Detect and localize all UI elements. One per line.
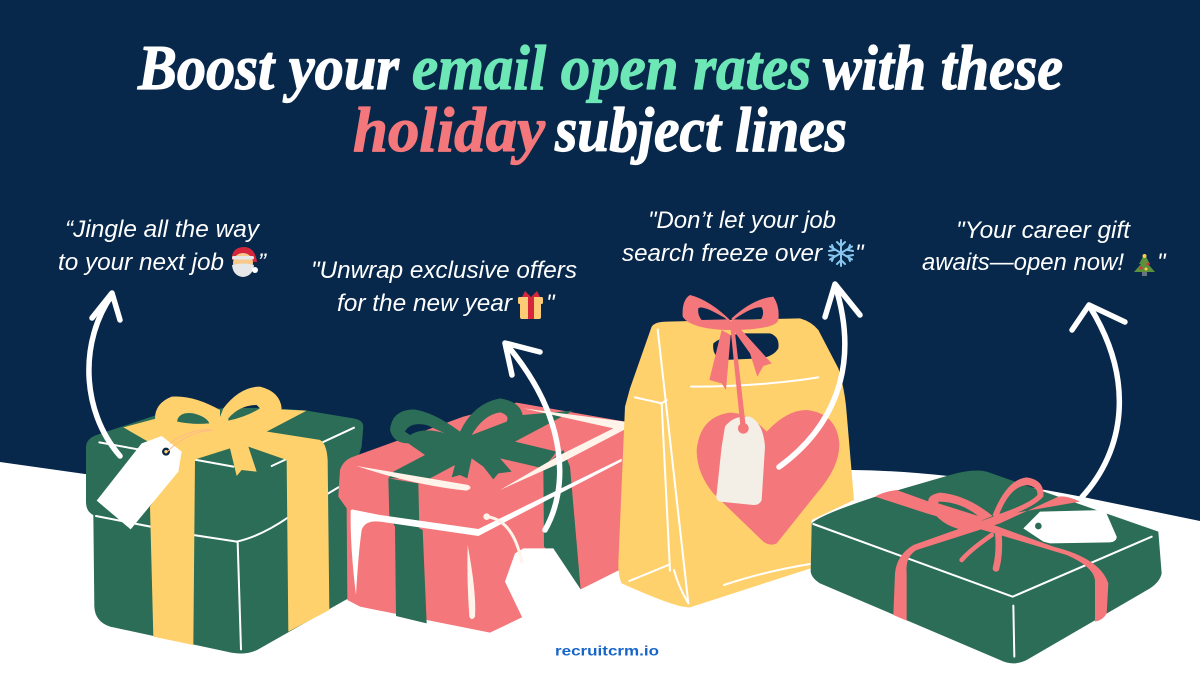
quote 1: to your next job [58, 249, 224, 276]
title: email open rates [412, 32, 811, 103]
pink ribbon [875, 477, 1108, 622]
title: subject lines [554, 94, 847, 165]
quote 4 [922, 217, 1167, 276]
bag body [618, 318, 854, 607]
icon: gift [518, 291, 543, 319]
gift tag [97, 429, 213, 529]
gift tag [1023, 510, 1117, 543]
quote 4: "Your career gift [956, 217, 1131, 244]
gift 1: green box with yellow ribbon [86, 387, 363, 654]
box edge lines [96, 428, 354, 649]
box body [86, 408, 363, 654]
green bow [388, 398, 573, 479]
quote 4: awaits—open now! [922, 249, 1124, 276]
quote 2: " [546, 290, 556, 317]
arrow: gift 4 to quote 4 [1072, 305, 1125, 497]
icon: santa [232, 247, 258, 277]
title: holiday [353, 94, 546, 165]
highlight lines [351, 408, 625, 619]
bag handle cut-out [713, 333, 779, 360]
arrow: gift 2 to quote 2 [505, 343, 560, 530]
yellow ribbon bands [123, 409, 329, 645]
brand footer: recruitcrm.io [555, 642, 659, 658]
quote 2: for the new year [337, 290, 513, 317]
quote 1 [58, 216, 267, 277]
tag [716, 416, 765, 505]
arrow: gift 1 to quote 1 [89, 293, 120, 456]
title: with these [823, 32, 1063, 103]
title: Boost your [137, 32, 400, 103]
quote 2 [311, 257, 577, 319]
gift tag [483, 513, 581, 618]
title [137, 32, 1063, 165]
box body [811, 471, 1162, 663]
quote 3: "Don’t let your job [648, 207, 836, 234]
bag fold lines [629, 329, 818, 603]
box body [338, 403, 625, 633]
heart [697, 410, 839, 545]
quote 3 [622, 207, 865, 267]
green bands [388, 450, 581, 623]
arrow: gift 3 to quote 3 [779, 284, 860, 467]
gift 3: yellow bag with heart [618, 295, 854, 607]
box edge lines [813, 524, 1152, 657]
quote 3: " [855, 240, 865, 267]
yellow bow [155, 387, 320, 476]
quote 1: “Jingle all the way [65, 216, 261, 243]
quote 2: "Unwrap exclusive offers [311, 257, 577, 284]
gift 2: pink box with green ribbon [338, 398, 625, 633]
quote 1: ” [258, 249, 267, 276]
quote 3: search freeze over [622, 240, 823, 267]
icon: christmas tree [1134, 254, 1155, 276]
icon: snowflake [829, 240, 853, 266]
quote 4: " [1157, 249, 1167, 276]
snowy ground [0, 462, 1200, 675]
gift 4: flat green box with pink ribbon [811, 471, 1162, 663]
pink bow and string [683, 295, 779, 434]
